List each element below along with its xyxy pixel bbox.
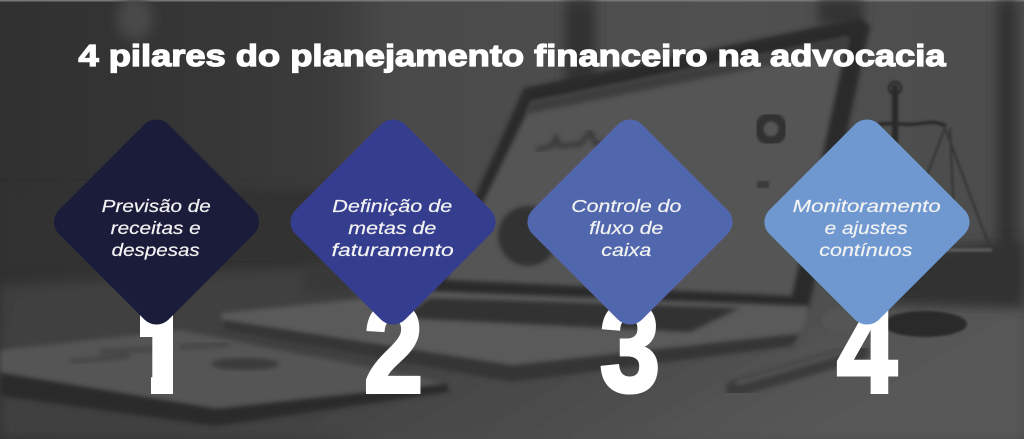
diamond 2: Definição de metas de faturamento bbox=[283, 112, 503, 332]
diamond 2: Definição de metas de faturamento: faturamento bbox=[332, 240, 454, 260]
tablet on desk bbox=[0, 330, 450, 426]
title: 4 pilares do planejamento financeiro na advocacia bbox=[78, 38, 946, 73]
diamond 3: Controle do fluxo de caixa bbox=[520, 112, 740, 332]
laptop bbox=[222, 18, 870, 382]
diamond 3: Controle do fluxo de caixa: fluxo de bbox=[589, 218, 664, 238]
number 3: 3 bbox=[600, 279, 660, 418]
diamond 2: Definição de metas de faturamento: metas de bbox=[348, 218, 437, 238]
diamond 1: Previsão de receitas e despesas: receitas e bbox=[111, 218, 201, 238]
diamond 4: Monitoramento e ajustes contínuos: contínuos bbox=[819, 240, 913, 260]
number 2: 2 bbox=[364, 280, 423, 419]
diamond 1: Previsão de receitas e despesas: despesas bbox=[112, 240, 200, 260]
number 1 bbox=[140, 315, 173, 394]
diamond 1: Previsão de receitas e despesas bbox=[47, 112, 266, 332]
diamond 3: Controle do fluxo de caixa: caixa bbox=[601, 240, 652, 260]
diamond 1: Previsão de receitas e despesas: Previsão de bbox=[102, 196, 211, 216]
diamond 4: Monitoramento e ajustes contínuos: e ajustes bbox=[825, 218, 908, 238]
diamond 2: Definição de metas de faturamento: Definição de bbox=[332, 196, 453, 216]
diamond 3: Controle do fluxo de caixa: Controle do bbox=[571, 196, 682, 216]
pen on desk bbox=[734, 352, 860, 389]
diamond 4: Monitoramento e ajustes contínuos: Monitoramento bbox=[793, 196, 941, 216]
number 1: 1 bbox=[123, 280, 198, 419]
number 4: 4 bbox=[837, 280, 897, 419]
diamond 4: Monitoramento e ajustes contínuos bbox=[757, 112, 977, 332]
balance scale bbox=[822, 82, 992, 337]
